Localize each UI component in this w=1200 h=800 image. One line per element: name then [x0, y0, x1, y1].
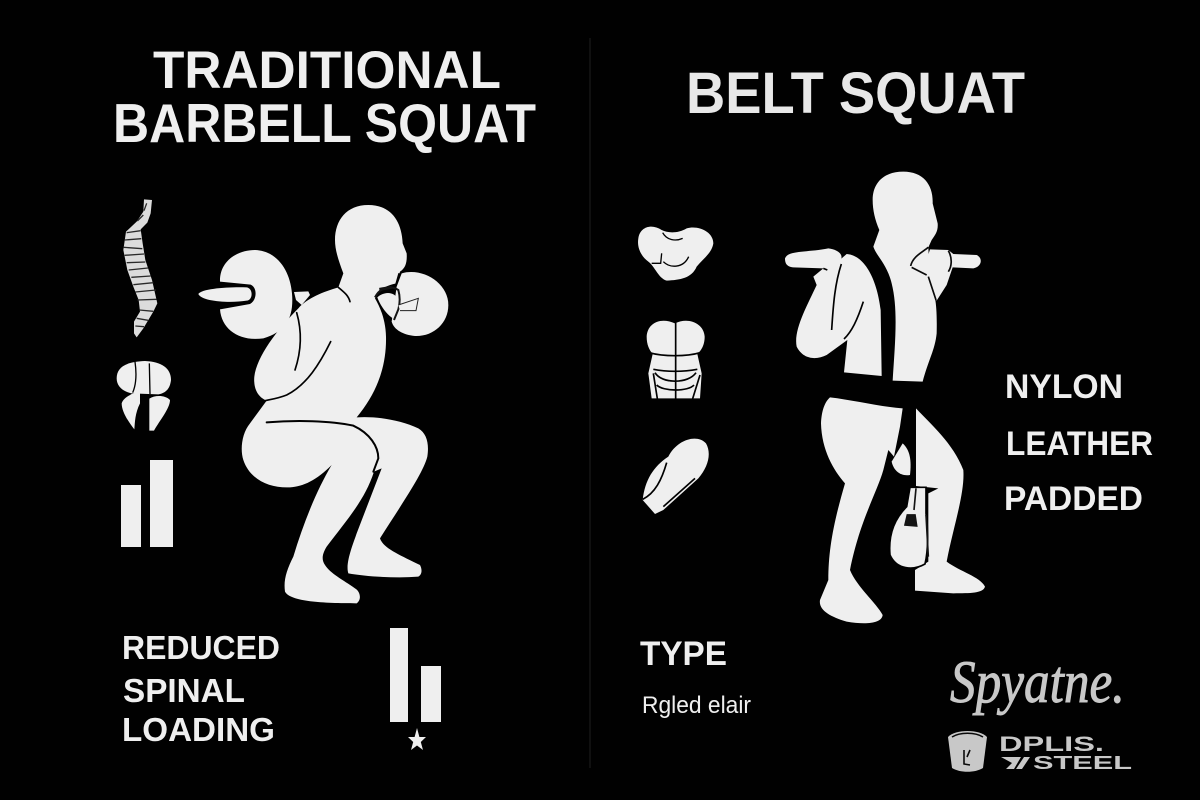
callout: reduced spinal loading [122, 629, 280, 748]
list: belt materials [1004, 368, 1153, 518]
left bar end, arm and torso [785, 248, 882, 376]
icon: pelvis [638, 227, 713, 281]
icon: glute pad [643, 439, 709, 514]
hanging weight [890, 487, 928, 568]
title: traditional barbell squat: TRADITIONAL [153, 41, 501, 100]
barbell left plate [220, 250, 292, 339]
right bar end and hand [927, 249, 981, 301]
weight handle detail [905, 488, 928, 557]
illustration: figure performing belt squat [785, 172, 985, 623]
head and back torso [873, 172, 938, 382]
bar stub [294, 291, 310, 305]
illustration: figure squatting with barbell [198, 205, 448, 603]
brand subtitle: STEEL [1033, 753, 1132, 773]
icon: glute muscles [117, 361, 171, 431]
hand gripping bar [375, 273, 418, 320]
body contour lines [265, 287, 378, 472]
brand mark [1001, 757, 1030, 769]
list: belt materials: NYLON [1005, 368, 1123, 406]
icon: shield [948, 731, 987, 772]
icon: star [408, 728, 426, 750]
brand name: DPLIS. [999, 733, 1104, 756]
title: belt squat: BELT SQUAT [686, 61, 1025, 126]
callout: reduced spinal loading: SPINAL [123, 672, 245, 709]
icon: spine [123, 199, 157, 337]
rear leg [915, 408, 985, 593]
logo: script wordmark: Spyatne. [950, 649, 1125, 715]
hand contour detail [911, 247, 951, 300]
barbell right plate [392, 272, 448, 336]
front leg [820, 397, 903, 623]
list: belt materials: LEATHER [1006, 425, 1153, 463]
panel: belt squat [638, 61, 1153, 773]
label: type value: Rgled elair [642, 692, 751, 719]
list: belt materials: PADDED [1004, 480, 1143, 518]
chart: two rising bars [121, 460, 173, 547]
belt strap weight [892, 443, 911, 475]
logo: shield and steel brand [948, 731, 1132, 773]
body silhouette [242, 205, 428, 603]
callout: reduced spinal loading: LOADING [122, 711, 275, 748]
arm contour lines [823, 264, 863, 339]
chart: comparison bars with star [390, 628, 441, 750]
title: traditional barbell squat [113, 41, 536, 154]
callout: reduced spinal loading: REDUCED [122, 629, 280, 666]
barbell left end [198, 287, 252, 302]
panel: traditional barbell squat [113, 41, 536, 750]
shield detail [952, 733, 983, 765]
icon: abdominal muscles [647, 321, 705, 400]
label: type: TYPE [640, 635, 727, 673]
title: traditional barbell squat: BARBELL SQUAT [113, 92, 536, 154]
